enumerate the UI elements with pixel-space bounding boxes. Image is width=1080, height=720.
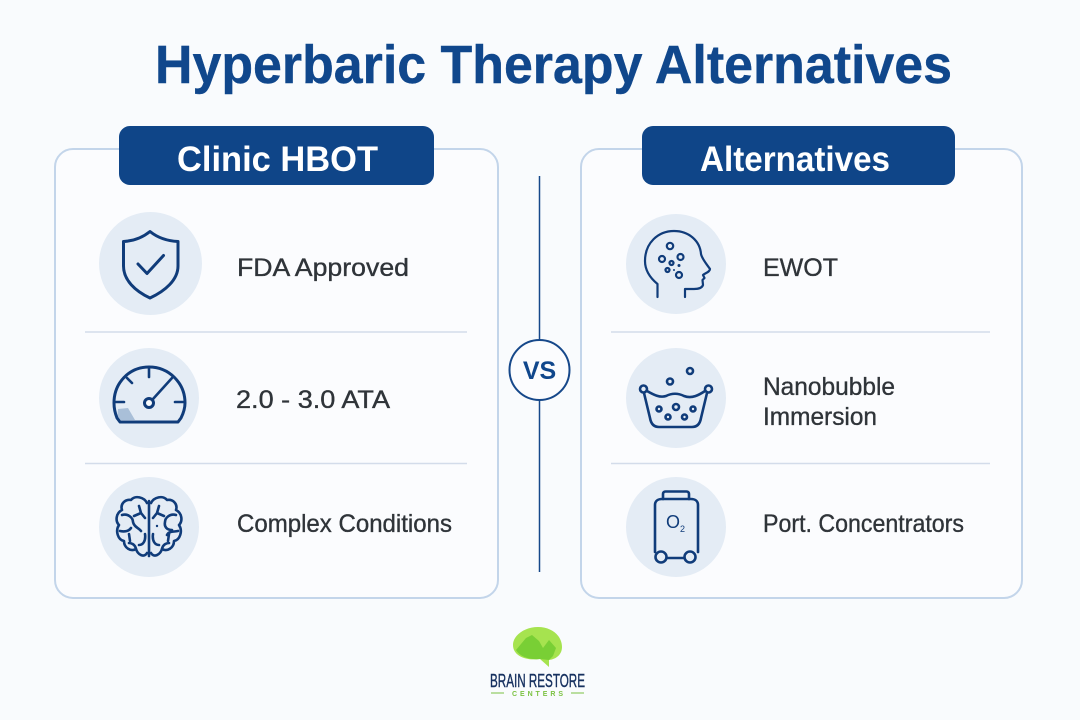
label: Nanobubble Immersion: Immersion [763, 403, 877, 431]
label: Port. Concentrators: Port. Concentrators [763, 510, 964, 538]
icon: portable oxygen concentrator: O [666, 512, 680, 532]
logo: Brain Restore Centers [490, 627, 585, 698]
center divider line [538, 176, 540, 572]
label: EWOT: EWOT [763, 254, 838, 282]
icon: bubble bath [626, 348, 726, 448]
logo tagline: CENTERS [512, 691, 563, 698]
panel header: Alternatives: Alternatives [700, 140, 890, 179]
logo: Brain Restore Centers: BRAIN RESTORE [490, 671, 585, 691]
panel header: Clinic HBOT: Clinic HBOT [177, 140, 378, 179]
icon: portable oxygen concentrator: 2 [680, 524, 685, 534]
label: 2.0 - 3.0 ATA: 2.0 - 3.0 ATA [236, 386, 390, 414]
icon: shield with check [99, 212, 202, 315]
label: FDA Approved: FDA Approved [237, 254, 409, 282]
icon: portable oxygen concentrator [626, 477, 726, 577]
icon: pressure gauge [99, 348, 199, 448]
VS badge [510, 340, 570, 400]
panel: Clinic HBOT [55, 126, 498, 598]
title: Hyperbaric Therapy Alternatives [155, 35, 952, 95]
label: Nanobubble Immersion [763, 373, 895, 431]
panel header: Alternatives [642, 126, 955, 185]
icon: brain [99, 477, 199, 577]
label: Nanobubble Immersion: Nanobubble [763, 373, 895, 401]
icon: head with bubbles [626, 214, 726, 314]
panel: Alternatives [581, 126, 1022, 598]
logo brain mark [513, 627, 562, 667]
panel header: Clinic HBOT [119, 126, 434, 185]
VS badge: VS [523, 357, 556, 385]
label: Complex Conditions: Complex Conditions [237, 510, 452, 538]
